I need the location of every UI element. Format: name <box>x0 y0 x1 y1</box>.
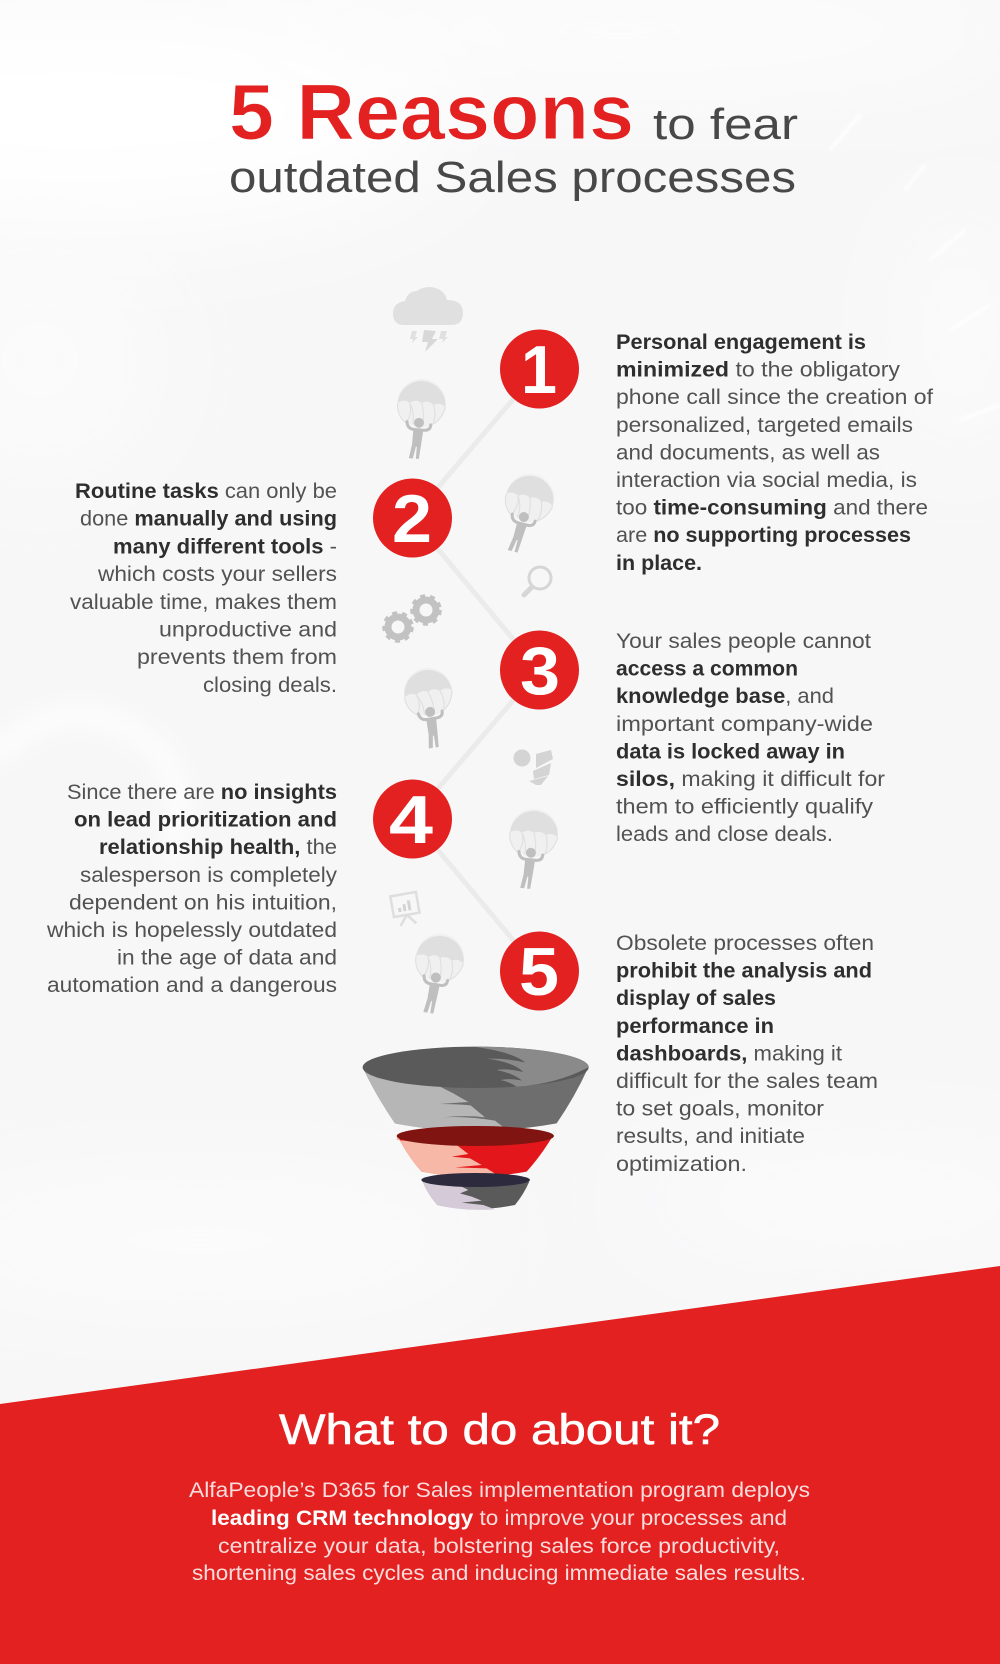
text: reason 3: silos, making it difficult for <box>616 768 885 791</box>
text: reason 1: are no supporting processes <box>616 524 911 547</box>
icon: parachutist 4 <box>504 807 560 891</box>
text: reason 1: Personal engagement is <box>616 331 866 354</box>
number 4: 4 <box>389 782 433 858</box>
text: reason 3: Your sales people cannot <box>616 630 871 653</box>
text: reason 2: unproductive and <box>159 618 337 642</box>
text: reason 5: Obsolete processes often <box>616 932 874 955</box>
bottom red panel <box>0 1266 1000 1664</box>
funnel <box>363 1047 589 1210</box>
icon: parachutist 2 <box>492 469 559 558</box>
call-to-action text: leading CRM technology to improve your processes and <box>211 1507 787 1530</box>
text: reason 3 <box>616 630 885 846</box>
icon: parachutist 1 <box>393 377 448 461</box>
text: reason 4: Since there are no insights <box>67 781 337 804</box>
icon: presentation board <box>390 892 421 927</box>
text: reason 3: them to efficiently qualify <box>616 796 874 819</box>
number 1 <box>500 330 579 408</box>
text: reason 4: in the age of data and <box>117 947 337 970</box>
heading: what to do: What to do about it? <box>279 1406 720 1454</box>
text: reason 3: important company-wide <box>616 713 873 736</box>
icon: parachutist 5 <box>408 931 467 1017</box>
call-to-action text: AlfaPeople’s D365 for Sales implementation program deploys <box>189 1479 810 1502</box>
title: outdated Sales processes <box>229 153 796 202</box>
icon: storm cloud <box>393 287 463 352</box>
text: reason 5: performance in <box>616 1015 774 1038</box>
text: reason 1: and documents, as well as <box>616 441 880 464</box>
text: reason 2: which costs your sellers <box>97 563 337 586</box>
text: reason 5: dashboards, making it <box>616 1042 842 1065</box>
text: reason 3: data is locked away in <box>616 740 845 763</box>
text: reason 4: dependent on his intuition, <box>69 891 337 914</box>
text: reason 5: optimization. <box>616 1153 747 1176</box>
text: reason 2: Routine tasks can only be <box>75 480 337 503</box>
text: reason 5: prohibit the analysis and <box>616 960 872 983</box>
number 3 <box>500 630 579 710</box>
call-to-action text <box>189 1479 810 1585</box>
text: reason 1 <box>616 331 933 575</box>
text: reason 1: interaction via social media, is <box>616 469 917 492</box>
text: reason 4 <box>46 781 338 997</box>
title: to fear <box>653 100 798 149</box>
text: reason 3: leads and close deals. <box>616 823 833 846</box>
number 3: 3 <box>520 633 560 709</box>
icon: badge <box>514 750 553 785</box>
number 4 <box>373 780 452 858</box>
connector path between numbers <box>412 369 539 971</box>
text: reason 3: access a common <box>616 658 798 681</box>
text: reason 4: on lead prioritization and <box>74 809 337 832</box>
text: reason 2: many different tools - <box>113 535 337 558</box>
number 2 <box>373 478 452 558</box>
text: reason 1: minimized to the obligatory <box>616 359 901 382</box>
number 2: 2 <box>392 481 432 557</box>
text: reason 1: phone call since the creation of <box>616 386 933 409</box>
text: reason 5: display of sales <box>616 987 776 1010</box>
text: reason 2: closing deals. <box>203 674 337 697</box>
number 1: 1 <box>521 332 557 408</box>
text: reason 1: in place. <box>616 552 702 575</box>
text: reason 4: salesperson is completely <box>80 864 338 887</box>
call-to-action text: centralize your data, bolstering sales force productivity, <box>218 1535 780 1558</box>
text: reason 5: to set goals, monitor <box>616 1098 824 1121</box>
text: reason 3: knowledge base , and <box>616 685 834 708</box>
text: reason 2: prevents them from <box>137 646 337 669</box>
text: reason 5 <box>616 932 878 1176</box>
text: reason 5: difficult for the sales team <box>616 1070 878 1093</box>
call-to-action text: shortening sales cycles and inducing immediate sales results. <box>192 1562 806 1585</box>
text: reason 1: personalized, targeted emails <box>616 414 913 437</box>
icon: magnifier <box>524 567 551 595</box>
text: reason 2: done manually and using <box>80 508 337 531</box>
number 5: 5 <box>519 934 559 1010</box>
title: 5 Reasons <box>229 67 634 156</box>
icon: gears <box>384 596 440 641</box>
text: reason 4: which is hopelessly outdated <box>46 919 337 942</box>
text: reason 5: results, and initiate <box>616 1125 805 1148</box>
icon: parachutist 3 <box>401 665 460 751</box>
text: reason 1: too time-consuming and there <box>616 497 928 520</box>
text: reason 4: automation and a dangerous <box>47 974 337 997</box>
text: reason 2 <box>70 480 337 697</box>
text: reason 4: relationship health, the <box>99 836 337 859</box>
text: reason 2: valuable time, makes them <box>70 591 337 614</box>
title <box>229 67 798 202</box>
number 5 <box>500 932 579 1010</box>
